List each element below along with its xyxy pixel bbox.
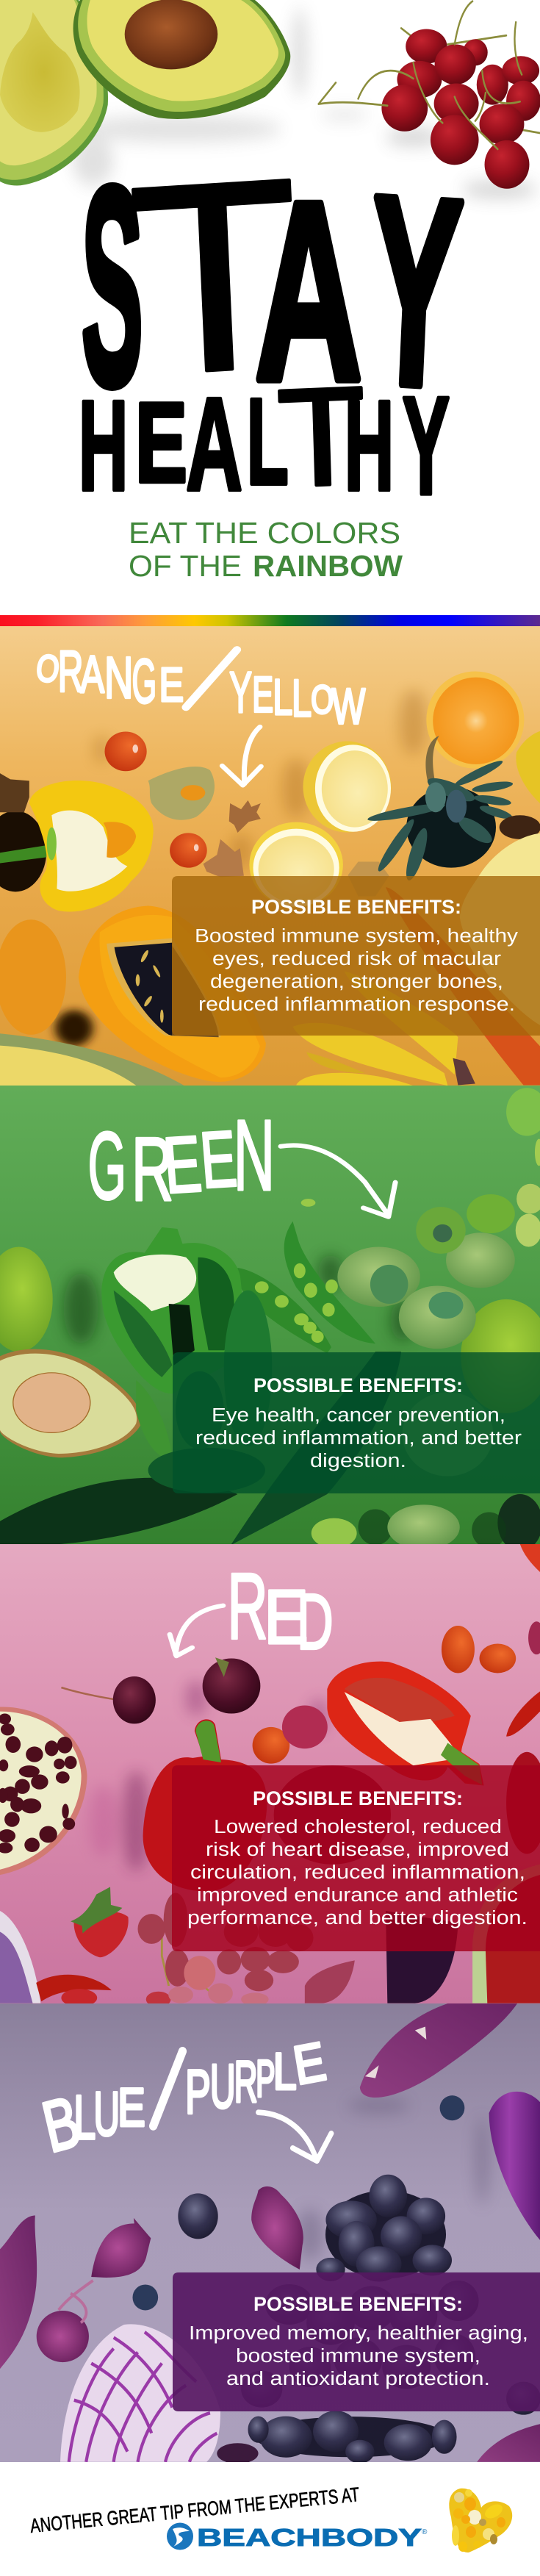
icon: dark eggplant leaf: [217, 2443, 259, 2464]
callout: purple benefits: boosted immune system,: [236, 2346, 480, 2367]
heading: orange yellow handwritten: O: [34, 647, 62, 691]
icon: radish sweet potato: [305, 1960, 355, 2003]
callout: red benefits: performance, and better digestion.: [187, 1908, 528, 1929]
heading: blue purple handwritten: R: [234, 2050, 258, 2115]
icon: papaya: [79, 905, 266, 1082]
icon: yellow pepper: [29, 781, 154, 911]
icon: purple eggplant: [489, 2092, 540, 2240]
title: STAY HEALTHY: S: [82, 129, 143, 444]
heading: green handwritten: E: [160, 1119, 205, 1210]
callout: orange benefits: Boosted immune system, healthy: [195, 926, 518, 947]
heading: green handwritten: G: [88, 1112, 126, 1219]
callout: orange benefits: degeneration, stronger bones,: [210, 972, 503, 992]
heading: orange yellow handwritten: O: [311, 678, 334, 722]
icon: blue grapes: [178, 2175, 540, 2464]
icon: green flowers and grapes: [301, 1088, 540, 1254]
icon: orange slice: [426, 671, 524, 769]
callout: red benefits: improved endurance and athletic: [197, 1885, 518, 1906]
callout: red benefits: circulation, reduced inflammation,: [190, 1862, 525, 1883]
heading: red handwritten: [227, 1554, 334, 1666]
icon: green bean: [136, 1380, 172, 1458]
panel: green: [0, 1086, 540, 1551]
heading: blue purple handwritten: P: [256, 2051, 276, 2108]
heading: orange yellow handwritten: G: [132, 645, 156, 716]
heading: blue purple handwritten: [35, 2031, 330, 2168]
callout: green benefits: digestion.: [310, 1451, 406, 1471]
heading: red handwritten: D: [297, 1578, 334, 1666]
icon: orange fruit: [0, 919, 66, 1035]
icon: red onions: [37, 2186, 303, 2362]
header photo art: [0, 0, 540, 198]
heading: orange yellow handwritten: W: [331, 678, 366, 734]
callout: orange benefits: reduced inflammation response.: [198, 994, 515, 1015]
icon: bottom greens: [312, 1494, 540, 1551]
shadows: [296, 2098, 489, 2260]
heading: green handwritten: E: [197, 1114, 240, 1205]
icon: cucumbers: [0, 1291, 401, 1545]
arrow: red section: [170, 1606, 223, 1656]
heading: orange yellow handwritten: R: [58, 639, 83, 705]
icon: purple cabbage edge: [0, 1911, 40, 2003]
icon: small tomato: [170, 833, 207, 868]
shadows: [64, 1255, 415, 1344]
icon: bananas: [292, 971, 475, 1086]
title: STAY HEALTHY: [79, 121, 467, 524]
icon: onion stem: [59, 2281, 93, 2323]
heading: blue purple handwritten: L: [73, 2084, 96, 2153]
panel: footer: [0, 2462, 540, 2576]
icon: grape tomatoes: [253, 1626, 516, 1764]
icon: sweet potato top: [360, 2003, 517, 2098]
heading: blue purple handwritten: L: [273, 2044, 297, 2100]
icon: eggplant: [386, 1911, 458, 2003]
subtitle: eat the colors of the rainbow: OF THE: [129, 549, 242, 583]
icon: physalis: [148, 767, 215, 820]
title: STAY HEALTHY: A: [255, 150, 362, 434]
subtitle: eat the colors of the rainbow: RAINBOW: [253, 549, 403, 583]
panel: blue / purple: [0, 2003, 540, 2464]
icon: blueberries: [132, 2095, 464, 2311]
registered mark: ®: [422, 2528, 428, 2536]
green food art: [0, 1088, 540, 1551]
arrow: orange section: [222, 727, 261, 785]
callout: red benefits: POSSIBLE BENEFITS:: [253, 1787, 463, 1809]
icon: pineapple leaves: [367, 736, 540, 882]
callout: purple benefits: POSSIBLE BENEFITS:: [253, 2293, 463, 2315]
arrow: green section: [281, 1145, 395, 1217]
heading: blue purple handwritten: P: [185, 2058, 211, 2127]
title: STAY HEALTHY: T: [276, 359, 368, 517]
icon: avocado: [0, 1349, 141, 1457]
callout: purple benefits: Improved memory, healthier aging,: [189, 2323, 528, 2344]
icon: radish: [282, 1706, 328, 1748]
icon: dried flowers: [204, 800, 389, 896]
heading: orange yellow handwritten: N: [104, 645, 133, 711]
shadow between fruit: [55, 1010, 93, 1046]
heading: red handwritten: E: [264, 1574, 309, 1660]
heading: green handwritten: R: [132, 1119, 173, 1219]
panel: green: N: [234, 1099, 275, 1212]
title: STAY HEALTHY: A: [186, 371, 242, 518]
title: STAY HEALTHY: Y: [403, 368, 450, 524]
heading: orange yellow handwritten: A: [80, 645, 104, 704]
icon: lemon halves: [249, 742, 391, 908]
callout: orange benefits: [172, 876, 540, 1036]
icon: carrot: [386, 887, 540, 1085]
orange yellow food art: [0, 671, 540, 1087]
rainbow divider: [0, 615, 540, 626]
icon: cut red pepper: [327, 1662, 484, 1785]
heading: orange yellow handwritten: E: [252, 666, 273, 722]
icon: plum: [203, 1657, 260, 1714]
callout: green benefits: POSSIBLE BENEFITS:: [253, 1374, 463, 1396]
icon: chilies and edge vegetables: [506, 1544, 540, 1854]
title: STAY HEALTHY: L: [247, 373, 289, 510]
callout: orange benefits: POSSIBLE BENEFITS:: [251, 896, 461, 918]
heading: red handwritten: R: [227, 1554, 268, 1659]
icon: green pepper: [101, 1227, 243, 1393]
callout: orange benefits: eyes, reduced risk of macular: [212, 949, 502, 969]
panel: orange / yellow: [0, 626, 540, 1087]
heading: blue purple handwritten: E: [118, 2078, 145, 2138]
heading: green handwritten: [88, 1099, 275, 1219]
icon: cherries: [319, 1, 540, 198]
title: STAY HEALTHY: Y: [363, 139, 467, 444]
callout: purple benefits: and antioxidant protection.: [226, 2369, 490, 2389]
icon: pea pods: [237, 1221, 375, 1353]
icon: brussels sprouts: [337, 1233, 515, 1349]
callout: red benefits: [172, 1765, 540, 1951]
callout: red benefits: Lowered cholesterol, reduced: [214, 1817, 502, 1837]
icon: green apples: [0, 1246, 540, 1413]
title: STAY HEALTHY: T: [124, 121, 306, 433]
subtitle: eat the colors of the rainbow: [129, 516, 403, 583]
icon: kiwi: [403, 1392, 493, 1477]
icon: corn: [0, 1033, 186, 1087]
title: STAY HEALTHY: H: [345, 374, 394, 517]
heading: blue purple handwritten: E: [289, 2031, 330, 2097]
callout: red benefits: risk of heart disease, improved: [206, 1840, 509, 1860]
shadow under avocados: [72, 8, 309, 185]
icon: bottom chili and berry: [36, 1975, 112, 2007]
heading: orange yellow handwritten: L: [273, 669, 292, 725]
icon: pomegranate: [0, 1707, 87, 1875]
icon: strawberry: [71, 1887, 129, 1957]
logo: beachbody wordmark: BEACHBODY: [197, 2524, 422, 2551]
icon: whole red pepper: [143, 1719, 267, 1891]
panel: red: [0, 1544, 540, 2007]
icon: pineapple body: [460, 833, 540, 1025]
panel: header: [0, 0, 540, 583]
footer tagline: ANOTHER GREAT TIP FROM THE EXPERTS AT: [29, 2483, 361, 2537]
icon: sweet potato left: [0, 2215, 37, 2369]
shadows: [90, 1680, 327, 1872]
shadows: [95, 689, 427, 869]
title: STAY HEALTHY: H: [79, 374, 128, 517]
icon: beachbody globe: [167, 2522, 193, 2550]
heading: blue purple handwritten: U: [210, 2052, 236, 2121]
heading: blue purple handwritten: B: [35, 2081, 87, 2168]
icon: banana at edge: [516, 731, 540, 803]
heading: blue purple handwritten: U: [94, 2080, 120, 2149]
heading: orange yellow handwritten: L: [292, 670, 312, 728]
icon: sweet potato bottom right: [477, 2424, 540, 2462]
icon: watermelon: [472, 1865, 540, 2003]
heading: orange yellow handwritten: [34, 639, 366, 734]
red food art: [0, 1544, 540, 2007]
icon: tomato: [104, 731, 147, 771]
callout: green benefits: Eye health, cancer prevention,: [212, 1405, 505, 1426]
icon: red grapes: [138, 1893, 314, 2007]
purple food art: [0, 2003, 540, 2464]
heading: orange yellow handwritten: Y: [229, 659, 252, 725]
icon: blue grapes backing: [255, 2190, 447, 2457]
icon: red cabbage: [60, 2324, 220, 2462]
callout: green benefits: reduced inflammation, and better: [195, 1428, 522, 1449]
callout: purple benefits: [173, 2272, 540, 2411]
arrow: purple section: [259, 2112, 331, 2161]
icon: left avocado half: [0, 0, 108, 186]
icon: beet: [274, 1765, 391, 1865]
callout: green benefits: [173, 1352, 540, 1493]
heading: orange yellow handwritten: E: [159, 658, 184, 711]
icon: right avocado half with pit: [73, 0, 290, 119]
title: STAY HEALTHY: E: [135, 380, 187, 506]
icon: yellow food heart: [449, 2489, 512, 2552]
icon: dark cherry: [61, 1676, 156, 1723]
icon: left shadow and greens: [0, 773, 46, 891]
subtitle: eat the colors of the rainbow: EAT THE COLORS: [129, 516, 400, 550]
